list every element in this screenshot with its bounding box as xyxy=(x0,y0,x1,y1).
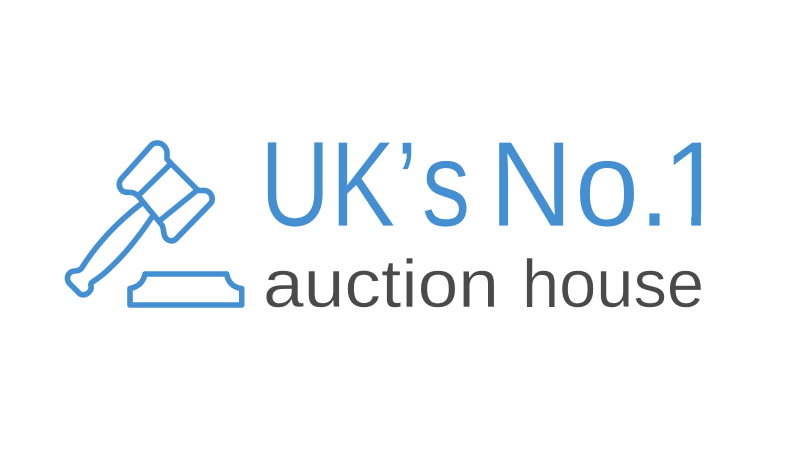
heading: UK's No.1 xyxy=(260,116,727,253)
gavel head bands xyxy=(140,164,198,220)
foot cover xyxy=(666,214,726,229)
sound block xyxy=(130,274,242,305)
word: auction: auction xyxy=(263,246,499,322)
word: UK's: UK’s xyxy=(260,117,470,253)
word: house: house xyxy=(522,246,704,322)
subheading: auction house xyxy=(263,246,704,322)
word: No.1: No.1 xyxy=(489,116,727,253)
gavel head xyxy=(119,143,212,241)
icon: gavel xyxy=(67,143,242,305)
gavel handle xyxy=(67,204,152,295)
